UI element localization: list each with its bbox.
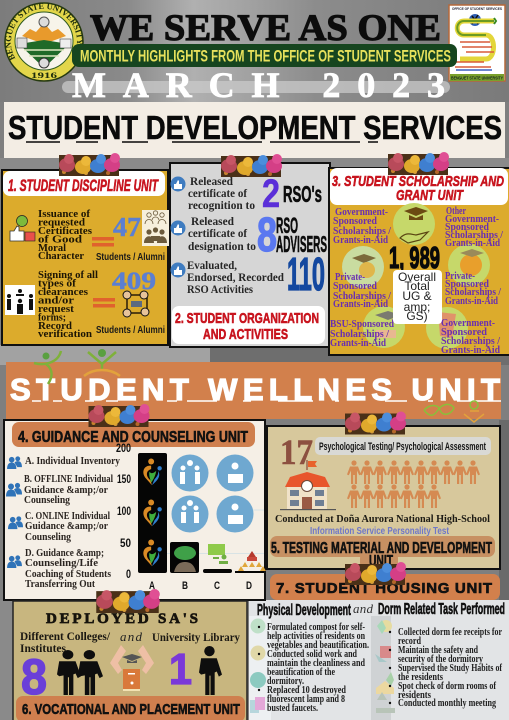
text: and: and [120,629,142,644]
logo: Benguet State University seal: BENGUET STATE UNIVERSITY [6,4,82,60]
heading: unit 7: 7. STUDENT HOUSING UNIT [276,580,492,597]
text: certificates of good moral character: Issuance of [38,209,91,220]
total: 1,989: Total [404,279,430,293]
text: government-sponsored scholarships, bottom: Grants-in-Aid [441,345,500,356]
list: counseling services [6,456,121,590]
bar chart: counseling counts: 150 [117,472,131,486]
bar chart: counseling counts: 100 [117,504,131,518]
logo: Office of Student Services [449,5,505,81]
text: other government-sponsored scholarships [445,206,503,249]
text: signing of clearances: verification [38,329,92,340]
text: different colleges: Different Colleges/ [20,631,111,643]
text: evaluated activities: Evaluated, [187,260,237,272]
list: dorm related tasks [389,627,503,709]
bar D [235,551,266,573]
number: 110: 110 [287,248,325,300]
label: students / alumni: Students / Alumni [96,251,165,263]
text: private-sponsored scholarships, right [445,271,501,307]
total: 1,989: Overall [398,270,436,284]
bar chart: counseling counts: D [246,580,252,592]
text: certificates of good moral character: requested [38,218,85,228]
text: BSU-sponsored scholarships [330,319,394,349]
icon: student [199,646,222,695]
bar chart: counseling counts: 200 [116,441,131,455]
text: other government-sponsored scholarships: Grants-in-Aid [445,238,500,249]
text: government-sponsored scholarships: Grants-in-Aid [333,235,388,246]
bar chart: counseling counts: B [182,580,188,592]
bar chart: counseling counts [116,441,266,592]
text: certificates of good moral character: Certificates [38,226,92,237]
list: counseling services: B. OFFLINE Individual [24,474,113,485]
text: government-sponsored scholarships, bottom [441,318,500,356]
icon: scholarship emblem, bottom left [363,306,405,348]
panel: guidance and counseling unit [4,420,266,600]
heading: unit 7 [270,574,500,600]
number: 8 RSO advisers: 8 [257,209,277,262]
section banner: Student Development Services [4,102,505,158]
icon: scholarship emblem, bottom right [426,307,468,349]
text: certificate of designation [188,216,256,253]
icon: scholarship emblem, right [448,244,490,286]
text: signing of clearances [38,270,98,340]
heading: unit 4 [12,422,255,447]
list: physical development tasks: busted faucets. [267,703,318,714]
text: certificate of recognition [188,176,255,212]
text: certificate of recognition: certificate of [188,188,247,200]
text: evaluated activities: RSO Activities [187,284,253,296]
text: other government-sponsored scholarships: Government- [445,214,499,225]
total: 1,989 [389,240,442,324]
panel: student discipline unit [2,170,169,345]
text: government-sponsored scholarships, bottom: Sponsored [441,327,487,338]
text: signing of clearances: Signing of all [38,270,98,281]
text: certificate of recognition: Released [190,176,234,188]
text: government-sponsored scholarships: Scholarships / [333,226,391,237]
text: certificate of recognition: recognition to [188,200,255,212]
text: government-sponsored scholarships, bottom: Scholarships / [441,336,500,347]
list: physical development tasks: Conducted solid work and [267,649,357,660]
equals sign [93,298,115,308]
number: 2 RSO's: 2 [262,172,280,216]
bar chart: counseling counts: 50 [120,536,131,550]
text: test name: Information Service Personality Test [310,525,449,537]
list: physical development tasks: fluorescent lamp and 8 [267,694,345,705]
text: government-sponsored scholarships, bottom: Government- [441,318,495,329]
text: venue: Conducted at Doña Aurora National High-School [275,514,490,525]
subheadings: and [353,601,374,616]
heading: unit 2: 2. STUDENT ORGANIZATION [175,310,319,327]
heading: unit 3: GRANT UNIT [396,187,464,204]
list: dorm related tasks: the residents [398,672,443,683]
list: physical development tasks: maintain the cleanliness and [267,658,365,669]
icon: two students [57,650,103,695]
heading: unit 3 [330,168,508,205]
label: students / alumni: Students / Alumni [96,324,165,336]
subheadings [257,601,505,619]
text: other government-sponsored scholarships: Other [446,206,466,217]
text: government-sponsored scholarships [333,207,391,246]
total: 1,989: UG & [402,289,432,303]
icon: school building [280,460,336,510]
list: counseling services: Guidance &amp;/or [25,521,108,532]
heading: unit 1: 1. STUDENT DISCIPLINE UNIT [8,176,159,195]
text: signing of clearances: types of [38,278,77,290]
list: physical development tasks: beautification of the [267,667,335,678]
heading: deployed SAs: DEPLOYED SA'S [46,611,198,627]
title: WE SERVE AS ONE [90,8,441,49]
text: certificates of good moral character: Moral [38,243,66,254]
icon: meeting network [123,291,149,317]
list: counseling services: D. Guidance &amp; [25,548,104,559]
icon: thumbs up with check [10,216,35,241]
text: private-sponsored scholarships, right: Grants-in-Aid [445,296,498,307]
text: certificates of good moral character: Character [38,251,84,262]
list: physical development tasks: vegetables and beautification. [267,640,369,651]
text: signing of clearances: forms; [38,312,66,324]
list: physical development tasks: dormitory. [267,676,304,687]
text: other government-sponsored scholarships: Scholarships / [445,230,503,241]
text: BSU-sponsored scholarships: Grants-in-Aid [330,338,386,349]
icons: dorm tasks [375,620,395,713]
bar chart: counseling counts: A [149,580,155,592]
logo: Benguet State University seal: 1916 [31,70,57,80]
list: counseling services: Counseling [25,532,72,543]
text: certificates of good moral character [38,209,92,262]
icon: scholarship emblem, left [342,246,384,288]
panel: student housing unit [249,574,509,720]
number: 47: 47 [113,212,141,242]
logo: Office of Student Services: OFFICE OF STUDENT SERVICES [452,7,503,11]
list: physical development tasks: Replaced 10 destroyed [267,685,346,696]
text: private-sponsored scholarships, left: Grants-in-Aid [333,299,388,310]
number: 409: 409 [112,268,156,295]
number: 2 RSO's: RSO's [283,181,322,207]
icon: people seated at a table [5,285,35,315]
text: evaluated activities: Endorsed, Recorded [187,272,285,284]
panel: vocational and placement unit [13,601,247,720]
text: signing of clearances: request [38,304,75,315]
icon: hands with cap and book [110,645,154,691]
number: 8 colleges: 8 [21,649,47,705]
icon: decorative figures on banner [424,401,484,422]
icons: physical development [250,618,266,713]
list: counseling services: Transferring Out [25,579,95,590]
bar B [170,542,199,573]
list: dorm related tasks: Maintain the safety and [398,645,478,656]
bar chart: counseling counts: 0 [126,567,131,581]
list: dorm related tasks: residents [398,690,431,701]
number: 1 library: 1 [169,645,192,694]
text: different colleges [20,631,111,655]
banner: student wellness unit [6,362,501,419]
list: counseling services: A. Individual Inventory [25,456,121,467]
bar A [138,453,167,573]
text: signing of clearances: and/or [38,296,74,306]
month heading: MARCH 2023 [72,65,445,105]
text: private-sponsored scholarships, right: Scholarships / [445,287,501,298]
list: counseling services: C. ONLINE Individual [25,511,110,522]
heading: unit 1 [3,171,165,196]
icons: blue counseling circles [172,454,254,532]
list: dorm related tasks: security of the dormitory [398,654,483,665]
heading: unit 5: UNIT [369,553,393,570]
list: counseling services: Counseling/Life [25,558,98,569]
list: dorm related tasks: record [398,636,421,647]
number: 2 RSO's [262,172,322,216]
total: 1,989: GS) [406,309,428,323]
icon: graduation cap and hand [393,203,435,245]
text: government-sponsored scholarships: Government- [335,207,388,218]
text: university library: University Library [152,632,240,644]
text: signing of clearances: Record [38,321,72,332]
list: counseling services: Guidance &amp;/or [24,485,108,496]
text: private-sponsored scholarships, left: Scholarships / [333,291,391,302]
total: 1,989: 1, 989 [389,240,440,275]
number: 8 RSO advisers [257,209,327,262]
label: psychological testing [315,437,491,455]
text: certificates of good moral character: of Good [38,234,82,246]
icon: green wellness figures [34,349,120,384]
number: 8 RSO advisers: RSO [276,213,298,238]
icon: like buttons [170,176,186,278]
list: counseling services: Coaching of Students [25,569,111,580]
text: government-sponsored scholarships: Sponsored [333,216,377,227]
text: certificate of designation: certificate of [188,228,247,240]
text: evaluated activities [187,260,285,296]
heading: unit 4: 4. GUIDANCE AND COUNSELING UNIT [18,429,248,446]
heading: unit 2 [172,306,325,344]
pictogram: 17 people [347,460,480,508]
equals sign [92,237,114,246]
panel: student scholarship and grant unit [329,168,509,356]
infographic page: ADVISERS [276,231,327,257]
text: private-sponsored scholarships, left: Private- [335,272,365,283]
list: physical development tasks [258,622,369,714]
panel: student organization and activities [170,163,330,347]
heading: unit 5 [270,536,495,570]
total: 1,989: amp; [404,300,430,314]
number: 17: 17 [280,432,313,472]
icon: group of people [142,210,169,246]
list: physical development tasks: Formulated compost for self- [267,622,365,633]
heading: unit 6: 6. VOCATIONAL AND PLACEMENT UNIT [22,701,240,718]
text: BSU-sponsored scholarships: BSU-Sponsored [330,319,394,330]
text: BSU-sponsored scholarships: Scholarships / [330,329,389,340]
bar C [203,544,232,573]
banner: student wellness unit: STUDENT WELLNES UNIT [10,372,500,407]
push pins [59,152,449,613]
text: other government-sponsored scholarships: Sponsored [445,222,489,233]
text: certificate of designation: designation to [188,241,256,253]
list: physical development tasks: help activities of residents on [267,631,365,642]
text: private-sponsored scholarships, right: Sponsored [445,279,489,290]
text: private-sponsored scholarships, left [333,272,391,310]
text: certificate of designation: Released [191,216,235,228]
text: private-sponsored scholarships, right: Private- [445,271,475,282]
text: private-sponsored scholarships, left: Sponsored [333,281,377,292]
heading: unit 6 [16,696,245,720]
list: counseling services: Counseling [24,495,71,506]
subheadings: Physical Development [257,602,351,619]
text: signing of clearances: clearances [38,287,88,298]
bar chart: counseling counts: C [214,580,220,592]
heading: unit 2: AND ACTIVITIES [203,326,288,343]
panel: testing material and development unit [267,426,500,570]
text: different colleges: Institutes [20,643,67,655]
